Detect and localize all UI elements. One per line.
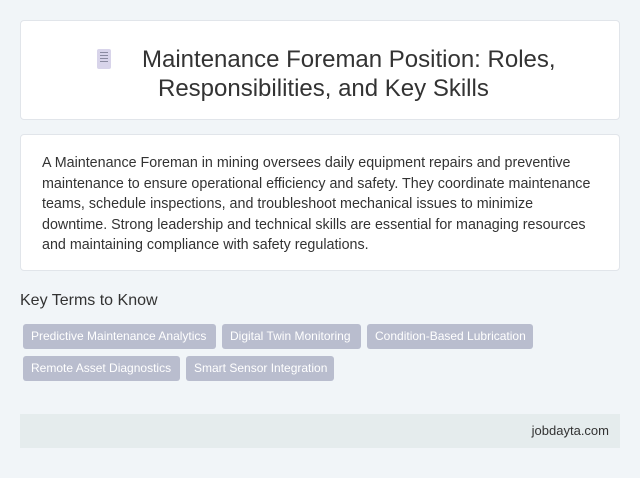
tags: Condition-Based Lubrication	[375, 329, 526, 343]
title	[142, 46, 556, 102]
tags: Smart Sensor Integration	[194, 361, 327, 375]
description text: A Maintenance Foreman in mining oversees daily equipment repairs and preventive maintenance to ensure operational efficiency and safety. They coordinate maintenance teams, schedule inspections, and troubleshoot mechanical issues to minimize downtime. Strong leadership and technical skills are essential for managing resources and maintaining compliance with safety regulations.	[42, 155, 590, 253]
tags: Predictive Maintenance Analytics	[31, 329, 206, 343]
description card	[20, 134, 620, 271]
footer: jobdayta.com	[532, 423, 609, 438]
title: Maintenance Foreman Position: Roles,	[142, 46, 556, 73]
tags: Digital Twin Monitoring	[230, 329, 350, 343]
header card	[20, 20, 620, 120]
footer	[20, 414, 620, 448]
tags: Remote Asset Diagnostics	[31, 361, 171, 375]
heading: key terms: Key Terms to Know	[20, 292, 158, 309]
icon: document	[97, 49, 111, 69]
title: Responsibilities, and Key Skills	[158, 75, 489, 102]
